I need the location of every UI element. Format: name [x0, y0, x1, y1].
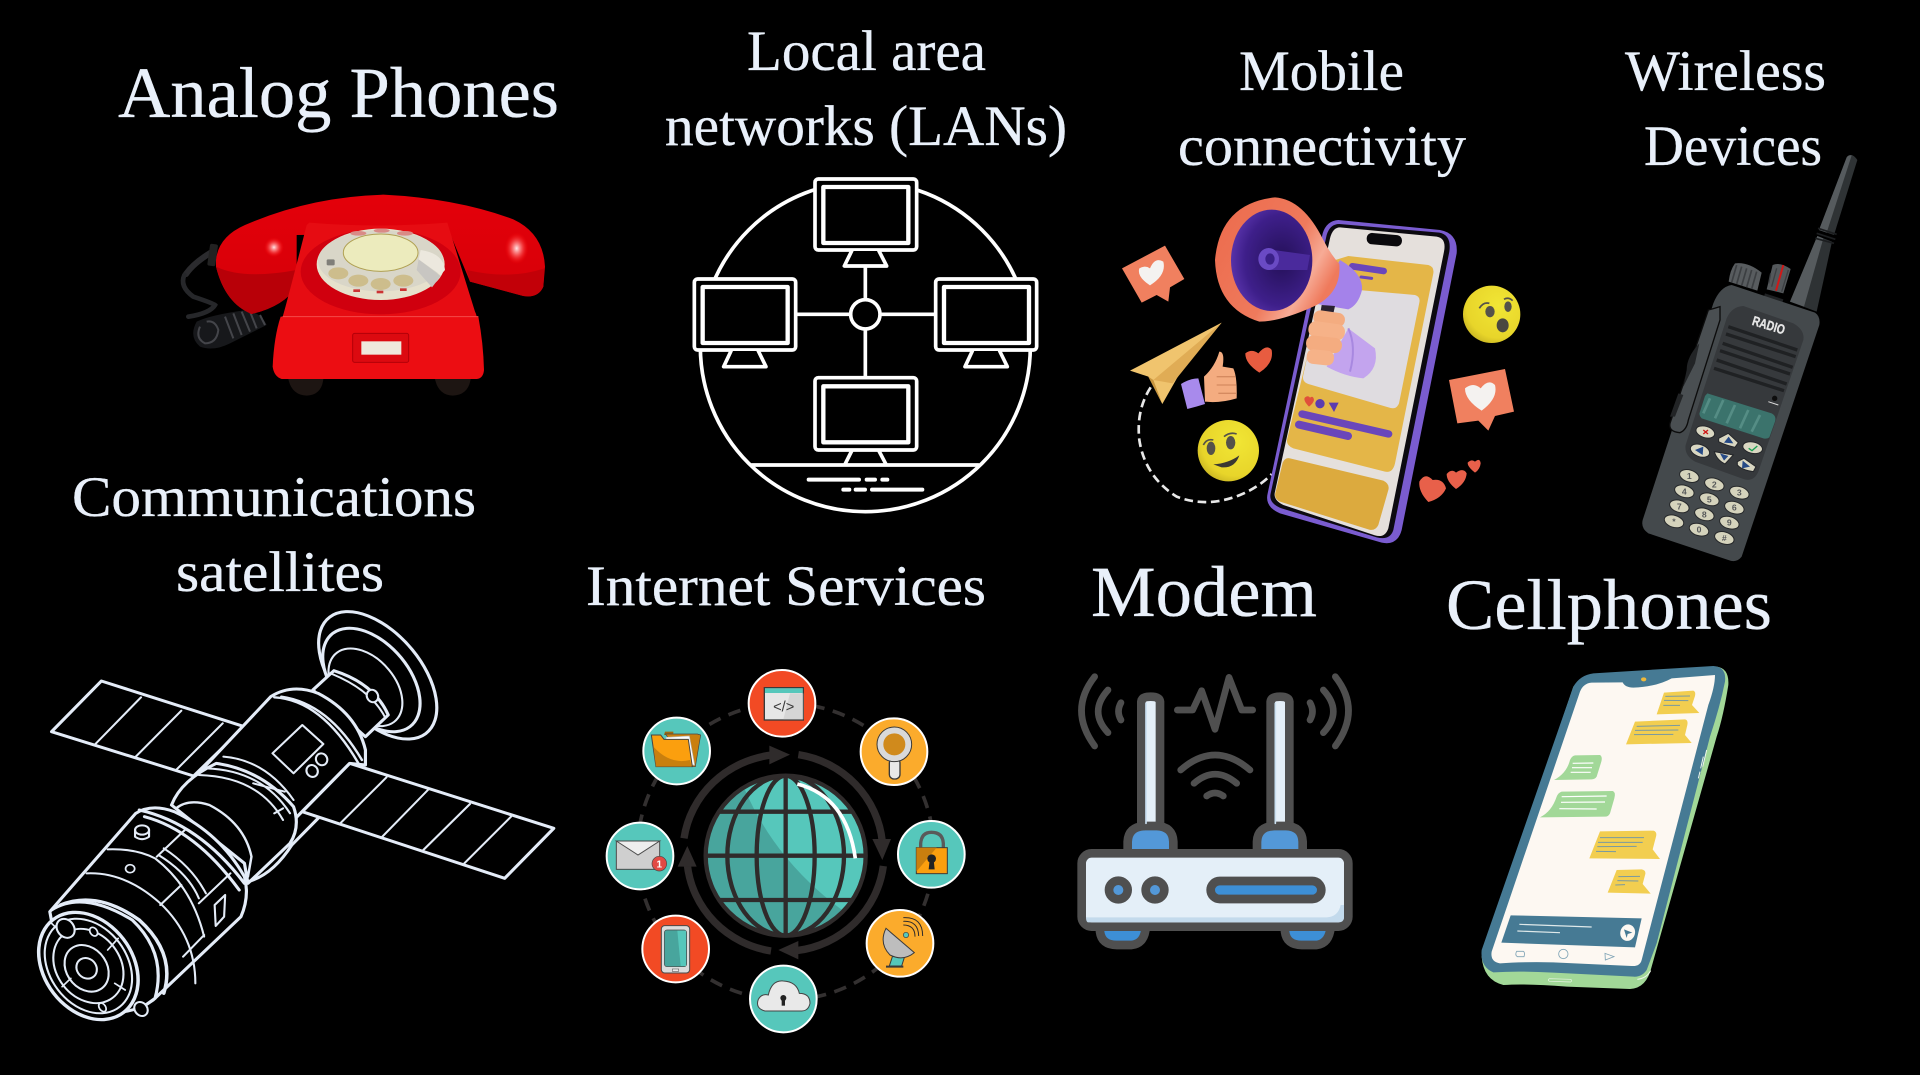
badge: folder — [643, 718, 710, 784]
heading: Wireless Devices: Devices — [1644, 115, 1822, 178]
panel: mobile connectivity — [1122, 40, 1520, 543]
rotating arrows — [678, 746, 891, 959]
badge: satellite dish — [867, 910, 933, 977]
globe — [704, 774, 868, 938]
icon: handheld radio: 8 — [1702, 509, 1707, 519]
icon: phone with megaphone and emojis — [1122, 197, 1520, 543]
panel: cellphones — [1446, 565, 1772, 989]
heading: Communications satellites: satellites — [176, 541, 384, 604]
icon: handheld radio: * — [1672, 516, 1676, 526]
heading: Local area networks: Local area — [747, 20, 986, 83]
badge: padlock — [898, 821, 965, 888]
badge: magnifier — [861, 718, 927, 785]
heading: Mobile connectivity — [1178, 40, 1466, 178]
icon: handheld radio — [1642, 155, 1857, 561]
icon: satellite line drawing — [18, 591, 554, 1037]
panel: modem — [1081, 552, 1348, 945]
badge: code window — [749, 670, 815, 737]
heading: Local area networks: networks (LANs) — [665, 95, 1067, 158]
heading: Internet Services: Internet Services — [586, 555, 986, 618]
panel: internet services — [586, 555, 986, 1032]
icon: handheld radio: 3 — [1737, 488, 1742, 498]
icon: smartphone with chat bubbles — [1481, 666, 1728, 989]
panel: communications satellites — [18, 466, 554, 1037]
icon: handheld radio: 4 — [1682, 486, 1687, 496]
heading: Local area networks — [665, 20, 1067, 158]
icon: handheld radio: 7 — [1677, 501, 1682, 511]
icon: handheld radio: 0 — [1697, 525, 1702, 535]
icon: handheld radio: 5 — [1707, 494, 1712, 504]
badge: code window: </> — [773, 699, 794, 715]
icon: globe with service badges — [607, 670, 965, 1032]
heading: Communications satellites — [72, 466, 476, 604]
heading: Analog Phones: Analog Phones — [118, 53, 559, 133]
icon: handheld radio: # — [1722, 533, 1727, 543]
heading: Wireless Devices: Wireless — [1625, 40, 1826, 103]
heading: Modem: Modem — [1091, 552, 1317, 632]
panel: analog phones — [118, 53, 559, 396]
badge: mail: 1 — [657, 859, 663, 870]
icon: red rotary telephone — [183, 195, 545, 396]
badge: smartphone — [642, 916, 709, 982]
icon: LAN diagram — [694, 179, 1037, 512]
badge: cloud lock — [750, 966, 817, 1032]
icon: handheld radio: 1 — [1687, 471, 1692, 481]
heading: Mobile connectivity: Mobile — [1239, 40, 1404, 103]
heading: Wireless Devices — [1625, 40, 1826, 178]
icon: handheld radio: 9 — [1727, 518, 1732, 528]
icon: handheld radio: RADIO — [1750, 313, 1787, 338]
badge: mail — [607, 823, 673, 889]
icon: wireless router — [1081, 677, 1348, 945]
icon: handheld radio: 2 — [1712, 479, 1717, 489]
icon: handheld radio: 6 — [1732, 503, 1737, 513]
heading: Cellphones: Cellphones — [1446, 565, 1772, 645]
heading: Communications satellites: Communications — [72, 466, 476, 529]
heading: Mobile connectivity: connectivity — [1178, 115, 1466, 178]
panel: local area networks — [665, 20, 1067, 512]
panel: wireless devices — [1625, 40, 1857, 561]
